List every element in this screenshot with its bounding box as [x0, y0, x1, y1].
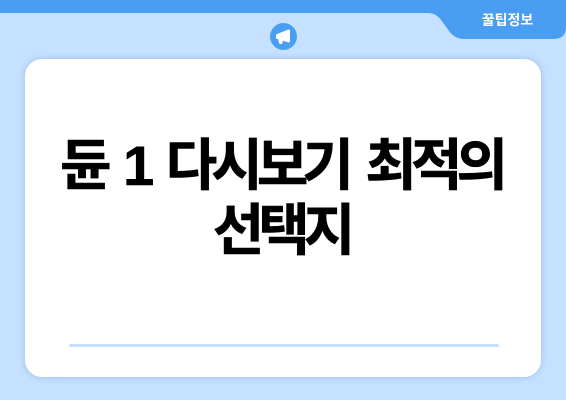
title: 선택지 [213, 199, 349, 262]
top banner with tab [0, 0, 566, 39]
bottom rule [69, 344, 499, 347]
panel: main card [25, 59, 541, 377]
icon: megaphone [270, 23, 297, 50]
title [60, 134, 502, 262]
tab label: 꿀팁정보 [482, 12, 533, 28]
title: 듄 1 다시보기 최적의 [60, 134, 502, 197]
